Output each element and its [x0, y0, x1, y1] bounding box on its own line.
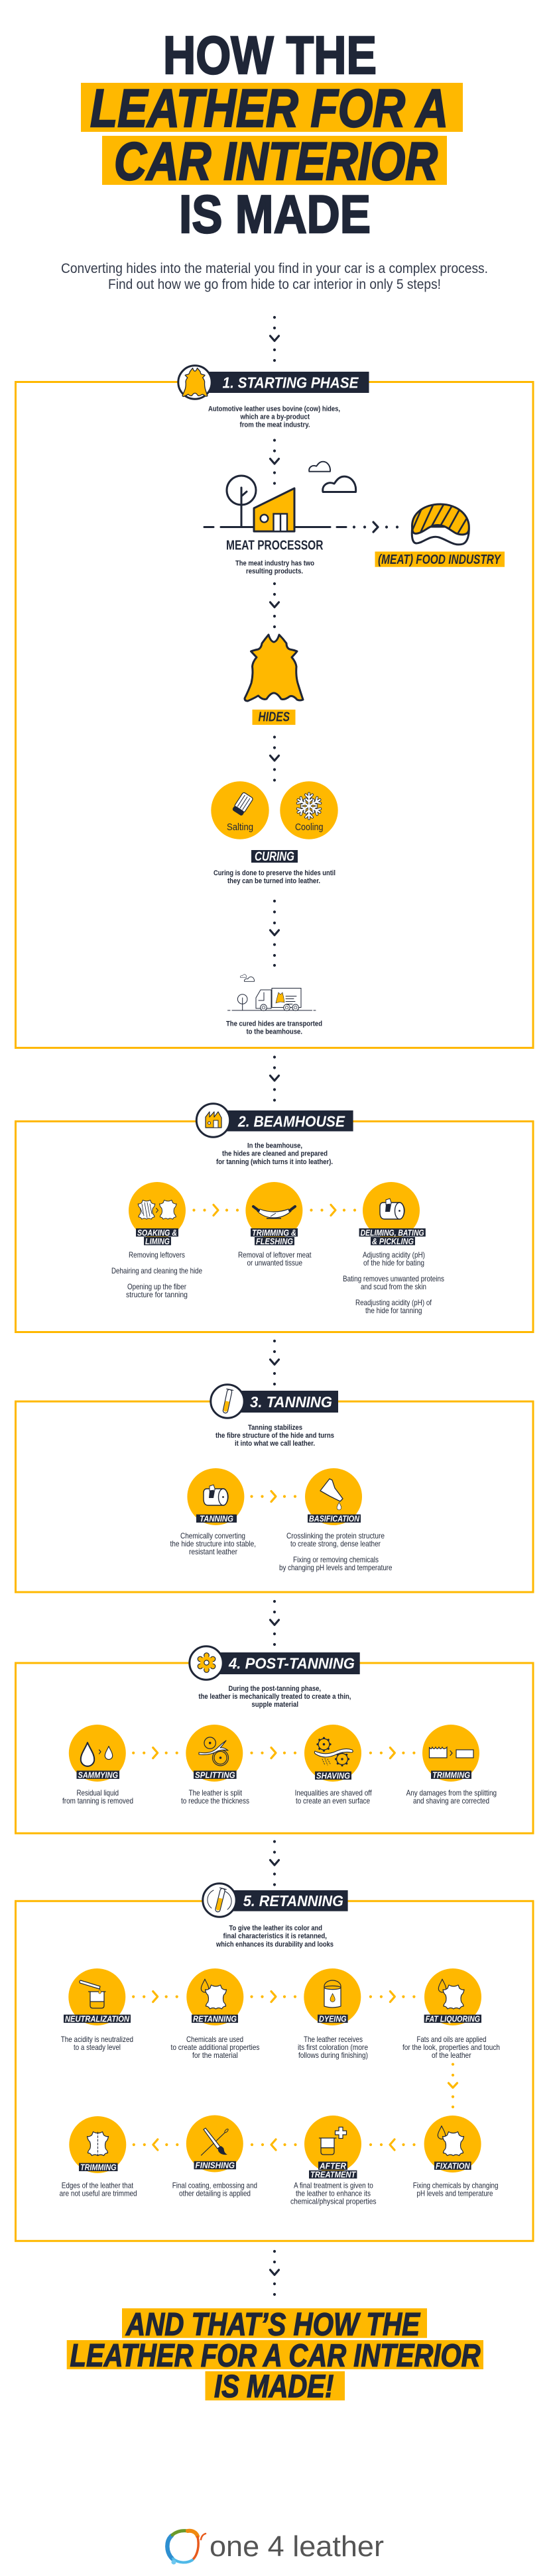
step: deliming, bating and pickling: Bating removes unwanted proteins	[343, 1275, 444, 1283]
step: finishing	[172, 2115, 257, 2198]
icon: hide with drop	[201, 1979, 227, 2009]
heading: post-tanning: 4. POST-TANNING	[228, 1655, 355, 1672]
text: curing	[214, 869, 336, 885]
arrow: neutralization to retanning	[132, 1992, 178, 2002]
text: retanning intro	[215, 1925, 334, 1949]
step: splitting	[181, 1725, 249, 1805]
text: tanning intro: it into what we call leather.	[235, 1440, 315, 1448]
step: finishing: FINISHING	[195, 2161, 235, 2171]
icon: soaking hides	[138, 1200, 176, 1219]
step: trimming: TRIMMING	[432, 1770, 470, 1780]
heading: starting phase	[178, 366, 369, 399]
text: automotive leather: which are a by-product	[240, 413, 310, 421]
step: basification: Crosslinking the protein structure	[286, 1532, 385, 1540]
step: fat liquoring: for the look, properties and touch	[402, 2043, 500, 2052]
step: retanning: Chemicals are used	[186, 2035, 243, 2044]
step: fixation: pH levels and temperature	[416, 2190, 493, 2198]
step: sammying	[62, 1725, 133, 1805]
arrow: soaking to trimming	[192, 1205, 239, 1215]
step: dyeing	[298, 1968, 368, 2060]
step: shaving	[295, 1725, 372, 1805]
intro text: Find out how we go from hide to car interior in only 5 steps!	[108, 277, 441, 292]
step: neutralization: The acidity is neutralized	[61, 2035, 133, 2044]
icon: hide with dashed cut	[88, 2132, 109, 2156]
arrow: to beamhouse	[271, 1055, 278, 1102]
text: two products: resulting products.	[246, 568, 303, 576]
icon: shaving rollers	[314, 1737, 353, 1766]
heading: post-tanning	[190, 1646, 360, 1680]
arrow: splitting to shaving	[250, 1748, 296, 1758]
step: dyeing: DYEING	[319, 2014, 347, 2023]
step: after treatment	[290, 2116, 377, 2206]
step: tanning: resistant leather	[189, 1548, 237, 1556]
arrow: to tanning	[271, 1340, 278, 1385]
step: splitting: to reduce the thickness	[181, 1797, 249, 1805]
step: trimming and fleshing: Removal of leftover meat	[238, 1251, 312, 1260]
panel: 1. starting phase	[16, 366, 533, 1047]
text: curing: Curing is done to preserve the hides until	[214, 869, 336, 877]
arrow: to retanning	[271, 1840, 278, 1886]
step: trimming and fleshing: FLESHING	[256, 1236, 293, 1246]
panel: 4. post-tanning	[16, 1646, 533, 1833]
step: soaking and liming: LIMING	[145, 1236, 170, 1246]
title: CAR INTERIOR	[114, 132, 438, 191]
step: neutralization	[61, 1968, 133, 2052]
step: tanning: Chemically converting	[180, 1532, 245, 1540]
heading: retanning: 5. RETANNING	[243, 1892, 343, 1909]
step: basification: Fixing or removing chemicals	[293, 1556, 379, 1564]
step: cooling: Cooling	[295, 822, 324, 833]
step: deliming, bating and pickling: DELIMING, BATING	[361, 1228, 424, 1238]
step: fat liquoring: FAT LIQUORING	[426, 2014, 480, 2023]
icon: beaker with plus	[320, 2127, 346, 2155]
text: retanning intro: final characteristics it is retanned,	[223, 1933, 327, 1941]
closing statement: IS MADE!	[214, 2369, 334, 2404]
step: trimming final	[60, 2116, 137, 2198]
icon: hide with drop	[438, 2126, 464, 2156]
step: fat liquoring: Fats and oils are applied	[416, 2035, 487, 2044]
text: post-tanning intro: During the post-tanning phase,	[228, 1685, 321, 1693]
intro text: Converting hides into the material you find in your car is a complex process.	[61, 261, 488, 276]
text: automotive leather	[208, 405, 340, 429]
icon: hide	[245, 635, 303, 701]
step: finishing: other detailing is applied	[179, 2190, 251, 2198]
step: after treatment: AFTER	[319, 2161, 347, 2171]
heading: tanning: 3. TANNING	[250, 1393, 332, 1411]
text: transported: to the beamhouse.	[247, 1028, 302, 1036]
step: tanning	[170, 1468, 256, 1556]
step: trimming final: are not useful are trimmed	[60, 2190, 137, 2198]
text: post-tanning intro	[198, 1685, 351, 1709]
step: dyeing: The leather receives	[304, 2035, 363, 2044]
step: deliming, bating and pickling: and scud from the skin	[361, 1283, 426, 1291]
heading: beamhouse	[196, 1104, 353, 1137]
step: dyeing: its first coloration (more	[298, 2043, 368, 2052]
step: shaving: SHAVING	[316, 1770, 350, 1780]
step: cooling	[280, 781, 338, 839]
label: hides: HIDES	[259, 710, 290, 725]
step: trimming and fleshing: TRIMMING &	[252, 1228, 296, 1238]
step: retanning: RETANNING	[193, 2014, 237, 2023]
step: soaking and liming	[111, 1182, 202, 1299]
text: beamhouse intro	[216, 1142, 333, 1166]
text: two products: The meat industry has two	[235, 560, 314, 568]
arrow: to curing	[271, 735, 278, 782]
text: beamhouse intro: for tanning (which turns it into leather).	[216, 1158, 333, 1166]
step: retanning: for the material	[192, 2051, 238, 2060]
text: beamhouse intro: In the beamhouse,	[247, 1142, 302, 1150]
arrow: tanning to basification	[250, 1491, 296, 1502]
step: deliming, bating and pickling: Adjusting acidity (pH)	[363, 1251, 425, 1260]
arrow: to food industry	[353, 522, 398, 532]
arrow: finishing to trimming	[133, 2139, 178, 2150]
icon: truck	[228, 975, 316, 1010]
step: deliming, bating and pickling: & PICKLING	[372, 1236, 414, 1246]
arrow: fat liquoring to fixation	[448, 2063, 458, 2108]
heading: tanning	[211, 1385, 338, 1418]
label: meat processor: MEAT PROCESSOR	[226, 539, 324, 553]
icon: bucket	[324, 1980, 341, 2008]
text: retanning intro: To give the leather its color and	[229, 1925, 322, 1933]
step: soaking and liming: SOAKING &	[137, 1228, 177, 1238]
logo: one 4 leather: one 4 leather	[210, 2530, 384, 2563]
step: deliming, bating and pickling: of the hide for bating	[363, 1259, 424, 1267]
step: deliming, bating and pickling: the hide for tanning	[365, 1307, 422, 1315]
step: basification: to create strong, dense leather	[290, 1540, 381, 1548]
step: salting: Salting	[227, 822, 253, 833]
closing statement	[67, 2306, 483, 2404]
step: fixation: Fixing chemicals by changing	[413, 2181, 499, 2190]
text: transported: The cured hides are transported	[226, 1020, 322, 1028]
arrow: after treatment to finishing	[251, 2139, 297, 2150]
icon: drum	[380, 1199, 404, 1219]
heading: retanning	[203, 1884, 348, 1917]
arrow: retanning to dyeing	[250, 1992, 296, 2002]
step: fat liquoring	[402, 1968, 500, 2060]
step: trimming and fleshing	[238, 1182, 312, 1267]
text: automotive leather: Automotive leather uses bovine (cow) hides,	[208, 405, 340, 413]
step: neutralization: to a steady level	[74, 2043, 121, 2052]
step: trimming final: TRIMMING	[80, 2162, 117, 2172]
heading: starting phase: 1. STARTING PHASE	[223, 374, 359, 392]
step: soaking and liming: structure for tanning	[126, 1291, 188, 1299]
text: transported	[226, 1020, 322, 1036]
heading: beamhouse: 2. BEAMHOUSE	[237, 1113, 345, 1130]
panel: 2. beamhouse	[16, 1104, 533, 1332]
arrow: shaving to trimming	[369, 1748, 415, 1758]
step: shaving: Inequalities are shaved off	[295, 1789, 372, 1798]
text: retanning intro: which enhances its durability and looks	[215, 1941, 334, 1949]
text: curing: they can be turned into leather.	[227, 877, 320, 885]
icon: drops	[81, 1743, 113, 1766]
step: basification: BASIFICATION	[309, 1513, 360, 1524]
step: sammying: SAMMYING	[78, 1770, 118, 1780]
step: sammying: Residual liquid	[77, 1789, 119, 1798]
title: LEATHER FOR A	[90, 79, 448, 138]
step: fixation: FIXATION	[436, 2161, 470, 2171]
text: two products	[235, 560, 314, 576]
step: sammying: from tanning is removed	[62, 1797, 133, 1805]
arrow: to meat processor	[271, 439, 278, 485]
step: trimming and fleshing: or unwanted tissue	[247, 1259, 302, 1267]
step: tanning: TANNING	[200, 1513, 233, 1524]
step: tanning: the hide structure into stable,	[170, 1540, 256, 1548]
arrow: to conclusion	[271, 2250, 278, 2296]
arrow: to starting phase	[271, 316, 278, 362]
arrow: trimming to deliming	[310, 1205, 356, 1215]
arrow: sammying to splitting	[132, 1748, 178, 1758]
label: food industry: (MEAT) FOOD INDUSTRY	[378, 553, 501, 567]
closing statement: AND THAT’S HOW THE	[125, 2306, 420, 2342]
step: after treatment: TREATMENT	[310, 2169, 356, 2180]
step: retanning: to create additional properties	[171, 2043, 260, 2052]
step: splitting: SPLITTING	[195, 1770, 235, 1780]
step: trimming: Any damages from the splitting	[406, 1789, 497, 1798]
step: fat liquoring: of the leather	[432, 2051, 471, 2060]
icon: brush and needle	[202, 2128, 229, 2155]
title	[81, 26, 463, 244]
panel: 3. tanning	[16, 1385, 533, 1592]
text: post-tanning intro: the leather is mechanically treated to create a thin,	[198, 1693, 351, 1701]
step: trimming	[406, 1725, 497, 1805]
arrow: to transport	[271, 900, 278, 967]
text: post-tanning intro: supple material	[251, 1701, 298, 1709]
icon: logo ring	[167, 2531, 206, 2565]
arrow: fixation to after treatment	[369, 2139, 416, 2150]
icon: hide with drop	[438, 1979, 464, 2009]
step: salting	[211, 781, 269, 839]
step: retanning	[171, 1968, 260, 2060]
step: neutralization: NEUTRALIZATION	[65, 2014, 130, 2023]
step: splitting: The leather is split	[189, 1789, 243, 1798]
step: trimming: and shaving are corrected	[413, 1797, 489, 1805]
step: deliming, bating and pickling	[343, 1182, 444, 1315]
text: tanning intro: Tanning stabilizes	[248, 1424, 302, 1432]
icon: trimmed edge	[430, 1747, 473, 1758]
step: soaking and liming: Dehairing and cleaning the hide	[111, 1267, 202, 1275]
step: basification: by changing pH levels and temperature	[279, 1564, 393, 1572]
icon: meat processor building with tree, clouds and ground	[204, 462, 356, 531]
icon: flask	[320, 1479, 343, 1510]
icon: fleshing knife	[253, 1207, 295, 1218]
title: HOW THE	[163, 26, 377, 85]
text: automotive leather: from the meat industry.	[240, 421, 310, 429]
icon: snowflake	[296, 794, 322, 819]
icon: beaker and test tube	[80, 1980, 105, 2008]
step: after treatment: chemical/physical properties	[290, 2198, 377, 2206]
step: basification	[279, 1468, 393, 1572]
arrow: to hides	[271, 582, 278, 628]
step: dyeing: follows during finishing)	[298, 2051, 368, 2060]
step: after treatment: the leather to enhance its	[296, 2190, 371, 2198]
text: tanning intro: the fibre structure of the hide and turns	[215, 1432, 334, 1440]
text: tanning intro	[215, 1424, 334, 1448]
step: deliming, bating and pickling: Readjusting acidity (pH) of	[355, 1299, 432, 1307]
title: IS MADE	[179, 185, 371, 244]
step: trimming final: Edges of the leather that	[62, 2181, 134, 2190]
icon: splitting rollers	[199, 1737, 228, 1766]
step: shaving: to create an even surface	[296, 1797, 370, 1805]
arrow: to post-tanning	[271, 1600, 278, 1646]
icon: meat	[412, 501, 471, 545]
label: curing: CURING	[255, 850, 294, 864]
icon: salt shaker	[232, 792, 253, 816]
step: soaking and liming: Opening up the fiber	[127, 1283, 186, 1291]
arrow: dyeing to fat liquoring	[369, 1992, 415, 2002]
step: soaking and liming: Removing leftovers	[129, 1251, 185, 1260]
text: beamhouse intro: the hides are cleaned and prepared	[222, 1150, 328, 1158]
step: fixation	[413, 2116, 499, 2198]
intro text	[61, 261, 488, 292]
step: after treatment: A final treatment is given to	[294, 2181, 373, 2190]
panel: 5. retanning	[16, 1884, 533, 2241]
step: finishing: Final coating, embossing and	[172, 2181, 257, 2190]
icon: tanning drum	[204, 1485, 228, 1505]
